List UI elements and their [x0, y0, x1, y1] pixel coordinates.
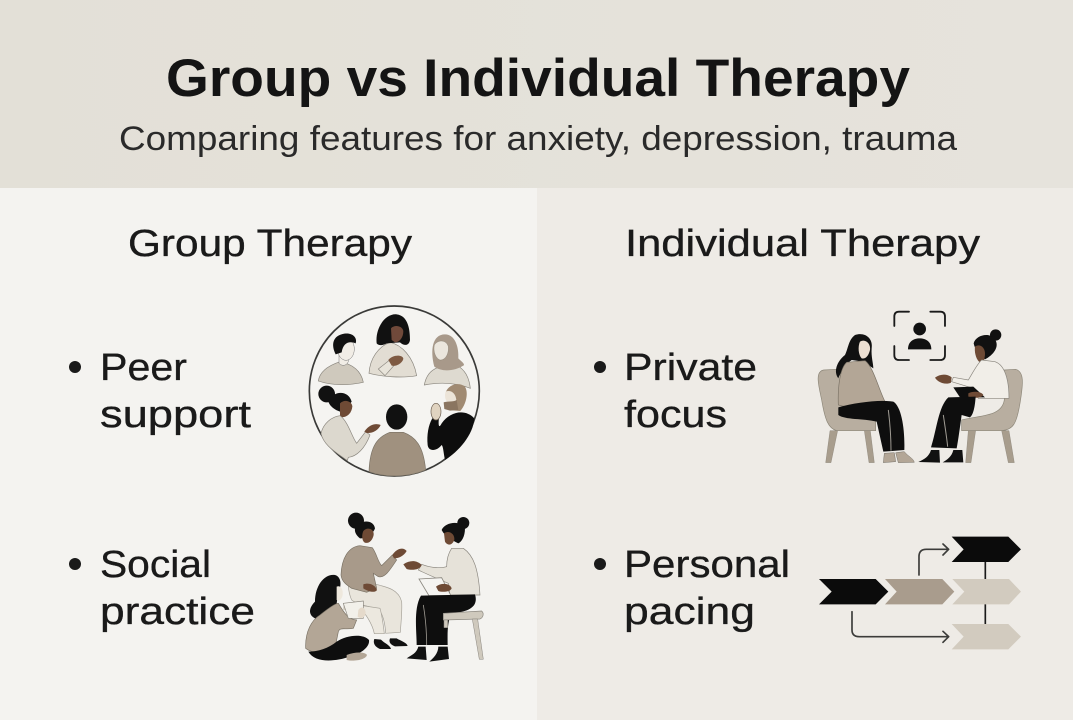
arrow: branch up — [919, 544, 949, 575]
icon: person in focus frame — [894, 312, 945, 360]
chart: branching chevron pathway — [819, 537, 1021, 649]
bullet: private focus — [594, 347, 757, 436]
chevron: step 1 — [819, 579, 888, 604]
chevron: step 2 — [885, 579, 954, 604]
bullet: personal pacing: Personal — [624, 544, 790, 586]
bullet: peer support: support — [100, 394, 252, 436]
bullet: private focus: focus — [624, 394, 727, 436]
panel: individual therapy — [537, 188, 1073, 720]
subtitle: Comparing features for anxiety, depression, trauma — [119, 120, 957, 158]
panel: group therapy — [0, 188, 537, 720]
heading: group therapy: Group Therapy — [128, 223, 412, 265]
bullet: personal pacing — [594, 544, 790, 633]
panel: header band — [0, 0, 1073, 188]
bullet: social practice: practice — [100, 591, 255, 633]
bullet: social practice — [69, 544, 255, 633]
icon: one-on-one session with focus frame — [818, 312, 1022, 463]
chevron: bottom branch — [952, 624, 1021, 649]
icon: circle of six people — [309, 306, 479, 476]
chevron: top branch — [952, 537, 1021, 562]
heading: individual therapy: Individual Therapy — [625, 223, 980, 265]
icon: three people talking — [306, 513, 483, 662]
bullet: peer support — [69, 347, 252, 436]
bullet: private focus: Private — [624, 347, 757, 389]
arrow: branch down — [852, 612, 949, 642]
bullet: peer support: Peer — [100, 347, 187, 389]
chevron: step 3 — [952, 579, 1021, 604]
bullet: social practice: Social — [100, 544, 211, 586]
title: Group vs Individual Therapy — [166, 49, 911, 108]
bullet: personal pacing: pacing — [624, 591, 755, 633]
